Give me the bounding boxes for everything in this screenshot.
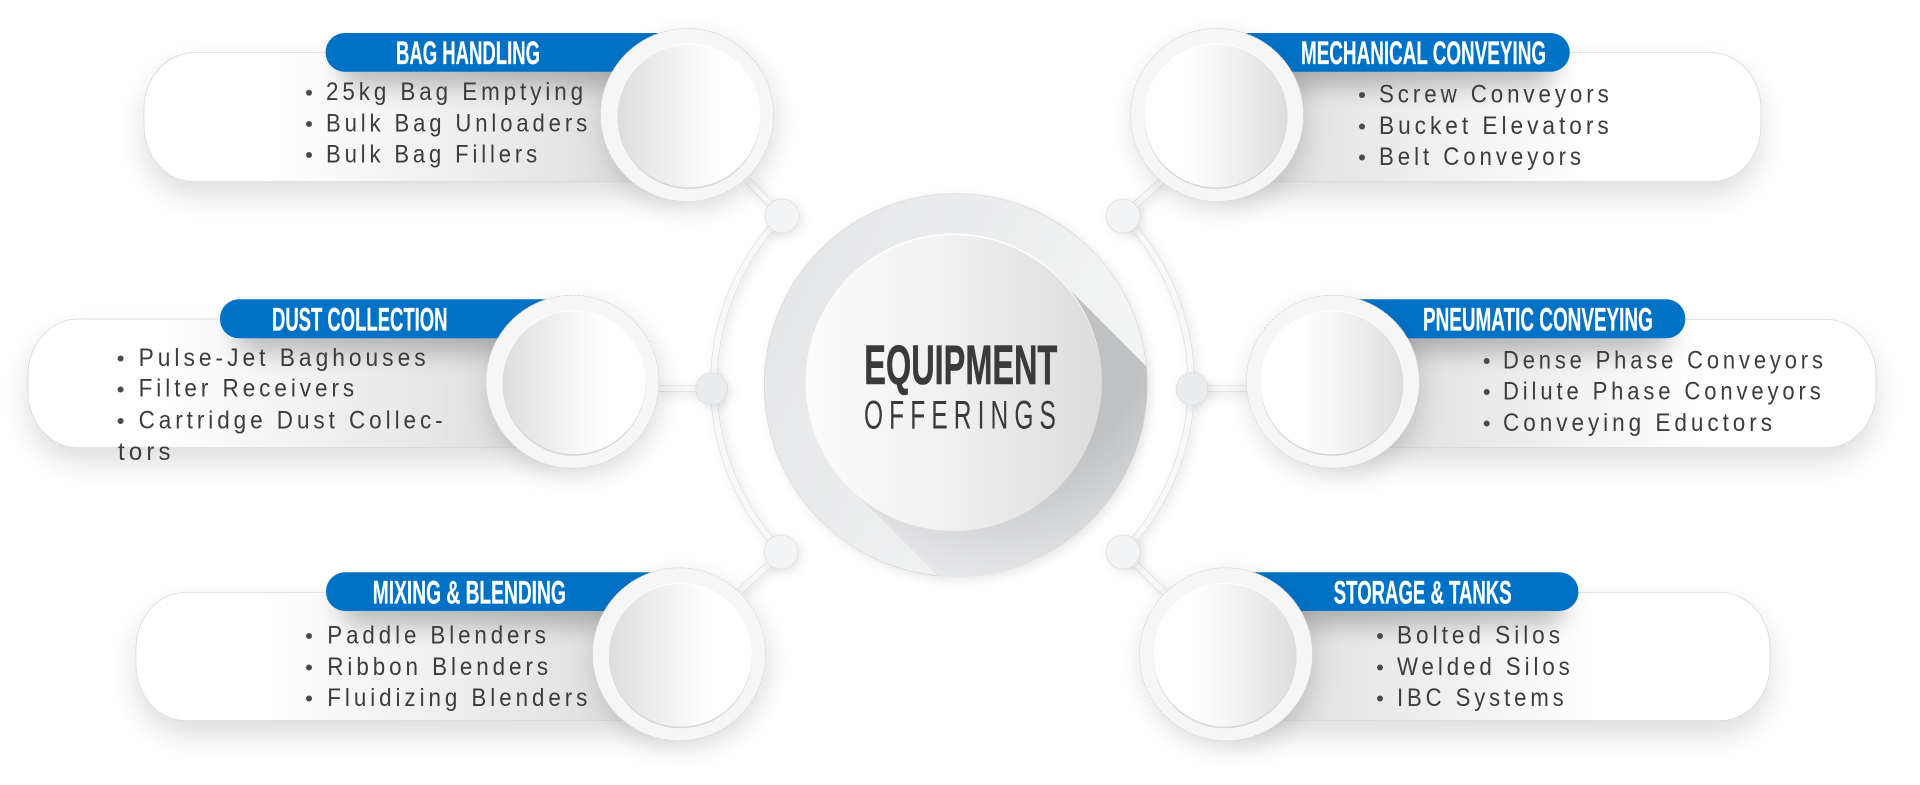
list: dust collection: tors <box>118 438 175 466</box>
title pill: mixing and blending: MIXING & BLENDING <box>373 574 566 610</box>
icon ring: bag handling <box>600 28 774 202</box>
icon ring: dust collection <box>486 295 659 468</box>
hub long shadow <box>860 290 1147 576</box>
list: storage and tanks <box>1377 621 1574 712</box>
icon ring: mixing and blending <box>592 568 766 741</box>
title pill: storage and tanks <box>1226 572 1578 611</box>
icon ring: pneumatic conveying <box>1246 295 1419 468</box>
list: mechanical conveying: Bucket Elevators <box>1379 112 1613 140</box>
list: pneumatic conveying <box>1484 346 1827 437</box>
list: pneumatic conveying: Conveying Eductors <box>1503 409 1776 437</box>
panel: storage and tanks <box>1140 568 1770 741</box>
list: dust collection: Pulse-Jet Baghouses <box>139 344 430 372</box>
list: storage and tanks: IBC Systems <box>1397 684 1568 712</box>
title pill: pneumatic conveying <box>1332 299 1685 338</box>
list: pneumatic conveying: Dilute Phase Conveyors <box>1503 377 1825 405</box>
panel: pneumatic conveying <box>1246 295 1876 468</box>
panel: dust collection <box>28 295 659 468</box>
list: mixing and blending <box>306 621 591 712</box>
list: bag handling: Bulk Bag Fillers <box>326 141 541 169</box>
hub title <box>864 333 1062 437</box>
title pill: pneumatic conveying: PNEUMATIC CONVEYING <box>1423 302 1653 338</box>
list: storage and tanks: Welded Silos <box>1397 653 1574 681</box>
list: dust collection: Cartridge Dust Collec- <box>139 406 447 434</box>
list: bag handling: Bulk Bag Unloaders <box>326 110 591 138</box>
title pill: bag handling <box>326 33 687 72</box>
list: mixing and blending: Paddle Blenders <box>327 621 550 649</box>
icon ring: storage and tanks <box>1140 568 1312 741</box>
list: bag handling <box>306 78 591 169</box>
list: pneumatic conveying: Dense Phase Conveyors <box>1503 346 1827 374</box>
hub inner disc <box>806 234 1102 531</box>
list: mechanical conveying: Screw Conveyors <box>1379 80 1613 108</box>
list: mixing and blending: Ribbon Blenders <box>327 653 552 681</box>
panel: mixing and blending <box>136 568 766 741</box>
list: mechanical conveying <box>1359 80 1613 171</box>
list: bag handling: 25kg Bag Emptying <box>326 78 587 106</box>
list: mechanical conveying: Belt Conveyors <box>1379 143 1585 171</box>
hub outer disc <box>764 194 1147 576</box>
title pill: bag handling: BAG HANDLING <box>396 35 540 71</box>
list: mixing and blending: Fluidizing Blenders <box>327 684 591 712</box>
title pill: mechanical conveying: MECHANICAL CONVEYING <box>1301 35 1546 71</box>
hub title: OFFERINGS <box>864 393 1062 437</box>
title pill: dust collection: DUST COLLECTION <box>272 302 448 338</box>
list: dust collection: Filter Receivers <box>139 375 358 403</box>
list: storage and tanks: Bolted Silos <box>1397 621 1564 649</box>
connector nodes <box>696 199 1208 569</box>
center hub <box>764 193 1152 582</box>
connector arcs and lines <box>658 180 1247 593</box>
panel: bag handling <box>144 28 774 202</box>
list: dust collection <box>118 344 447 466</box>
hub title: EQUIPMENT <box>864 333 1057 396</box>
panel: mechanical conveying <box>1130 28 1761 202</box>
title pill: storage and tanks: STORAGE & TANKS <box>1334 574 1512 610</box>
icon ring: mechanical conveying <box>1130 28 1304 202</box>
title pill: mechanical conveying <box>1217 33 1570 72</box>
